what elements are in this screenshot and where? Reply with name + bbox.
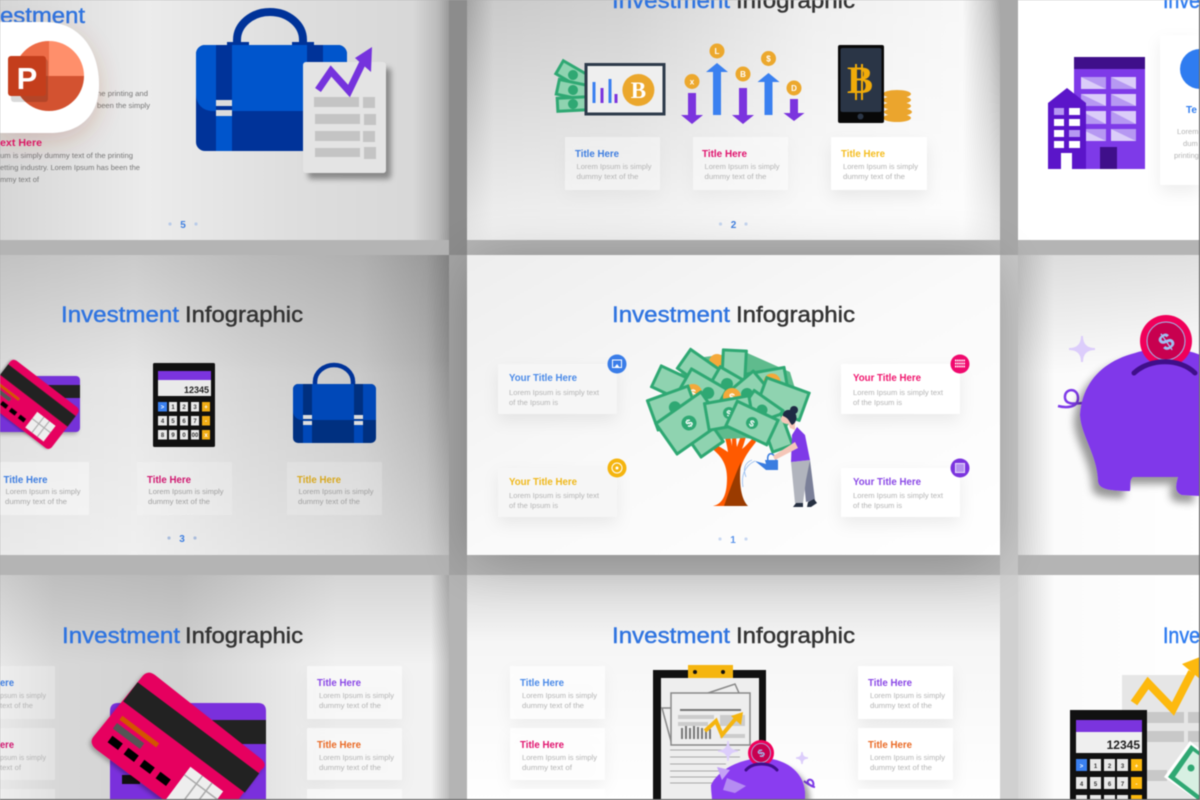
- card: yellow: Title Here: [297, 475, 341, 486]
- icon: rising and falling coin arrows: [681, 44, 804, 124]
- text block: top: been the simply: [97, 101, 150, 110]
- icon: piggy bank: $: [1154, 327, 1181, 357]
- icon: rising and falling coin arrows: D: [791, 84, 797, 93]
- card: right orange: Title Here: [868, 740, 912, 751]
- pagination: 5: [180, 220, 186, 231]
- card: blue: Title Here: [4, 475, 48, 486]
- card: bottom left: Your Title Here: [509, 477, 577, 488]
- card: top left: [498, 364, 617, 414]
- icon: rising and falling coin arrows: $: [766, 54, 771, 64]
- icon: briefcase: [196, 12, 347, 151]
- card: right purple: dummy text of the: [319, 701, 381, 710]
- pagination: [719, 220, 748, 231]
- text block: pink heading: um is simply dummy text of the printing: [0, 151, 133, 160]
- icon: small briefcase: [293, 365, 376, 443]
- icon: calculator: +: [204, 405, 208, 411]
- card: right orange: Lorem Ipsum is simply: [870, 753, 945, 762]
- slide: piggy bank: [1018, 255, 1200, 555]
- card: partial: dum: [1183, 139, 1198, 148]
- pagination: [167, 534, 197, 545]
- icon: calculator: 00: [192, 433, 199, 439]
- pagination: 3: [179, 534, 185, 545]
- slide: clipboard: [467, 575, 1000, 800]
- card: top right: of the Ipsum is: [853, 398, 902, 407]
- text block: top: he printing and: [97, 89, 148, 98]
- title: Infographic: [185, 302, 303, 327]
- card: partial: printing: [1174, 151, 1199, 160]
- title fragment: estment: [0, 3, 85, 28]
- icon: piggy bank small: $: [756, 747, 767, 761]
- card: yellow: Lorem Ipsum is simply: [843, 162, 918, 171]
- bills and coins canopy: $: [747, 418, 756, 429]
- text block: pink heading: mmy text of: [0, 175, 40, 184]
- card: pink: Lorem Ipsum is simply: [704, 162, 780, 171]
- title: Infographic: [185, 623, 303, 648]
- title: [61, 302, 303, 327]
- bills and coins canopy: $: [690, 388, 696, 400]
- pagination: 1: [730, 535, 736, 546]
- card: right orange: Lorem Ipsum is simply: [319, 753, 394, 762]
- card: left pink: [510, 728, 605, 780]
- icon: calculator: 6: [182, 419, 186, 425]
- card: bottom right: of the Ipsum is: [853, 501, 902, 510]
- card: bottom right: Your Title Here: [853, 477, 921, 488]
- card: right purple: Title Here: [317, 678, 361, 689]
- icon: calculator large: 5: [1094, 782, 1098, 788]
- icon: PowerPoint badge: P: [17, 61, 37, 96]
- card: bottom left: Lorem Ipsum is simply text: [509, 491, 600, 500]
- slide 3: card, calculator, bag: [0, 255, 449, 555]
- illustration: person with watering can: [742, 406, 817, 507]
- title: [62, 623, 303, 648]
- title: Investment: [61, 302, 179, 327]
- icon: calculator: >: [161, 405, 165, 411]
- card: partial: Lorem: [1177, 127, 1199, 136]
- card: left blue: [0, 666, 55, 719]
- card: right purple: Lorem Ipsum is simply: [319, 691, 394, 700]
- card: right orange: [858, 728, 953, 780]
- icon: calculator: [153, 363, 215, 447]
- text block: pink heading: [0, 138, 140, 184]
- card: left pink: Title Here: [520, 740, 564, 751]
- card: right purple: dummy text of the: [870, 701, 932, 710]
- icon: piggy bank: [1058, 315, 1200, 496]
- card: left pink: ere: [0, 740, 14, 751]
- icon: rising and falling coin arrows: L: [715, 47, 720, 56]
- icon: report with yellow arrow: [1122, 657, 1200, 800]
- icon: cash bills: [554, 59, 592, 113]
- bills and coins canopy: $: [729, 392, 735, 404]
- card: pink: dummy text of the: [148, 497, 210, 506]
- icon: cash bill: [1164, 741, 1200, 800]
- pagination: 2: [731, 220, 737, 231]
- icon: yellow target badge: [608, 458, 626, 478]
- shadow of the center slide: [475, 265, 992, 555]
- bills and coins canopy: $: [684, 417, 696, 430]
- icon: calculator: 8: [161, 433, 165, 439]
- card: blue: Lorem Ipsum is simply: [6, 487, 81, 496]
- icon: calculator: 3: [193, 405, 197, 411]
- card: left pink: [0, 728, 55, 780]
- card: top right: Your Title Here: [853, 373, 921, 384]
- card: pink: Title Here: [702, 149, 747, 160]
- bills and coins canopy: [646, 347, 811, 459]
- card: top left: of the Ipsum is: [509, 398, 558, 407]
- title: Investment: [612, 302, 730, 327]
- card: yellow: dummy text of the: [843, 172, 905, 181]
- tree trunk: [708, 426, 756, 506]
- card: right third: [307, 789, 402, 800]
- card: right purple: [307, 666, 402, 719]
- card: bottom left: of the Ipsum is: [509, 501, 558, 510]
- icon: calculator: 7: [193, 419, 197, 425]
- card: yellow: [287, 462, 382, 515]
- center slide: money tree: [467, 255, 1000, 555]
- card: left blue: Lorem Ipsum is simply: [522, 691, 597, 700]
- icon: credit cards: [0, 358, 81, 451]
- card: blue: Title Here: [575, 149, 619, 160]
- icon: calculator: 12345: [184, 385, 209, 395]
- card: pink: Title Here: [147, 475, 191, 486]
- title: [612, 623, 855, 648]
- card: right purple: [858, 666, 953, 719]
- card: right purple: Title Here: [868, 678, 912, 689]
- icon: phone with coins: B: [847, 59, 873, 102]
- illustration: money tree: [646, 347, 811, 506]
- icon: calculator: 0: [182, 433, 186, 439]
- icon: PowerPoint badge: [0, 22, 99, 133]
- icon: calculator: 4: [161, 419, 165, 425]
- text block: pink heading: etting industry. Lorem Ipsum has been the: [0, 163, 140, 172]
- icon: calculator: 9: [171, 433, 175, 439]
- slide: calculator and chart: [1018, 575, 1200, 800]
- card: right purple: Lorem Ipsum is simply: [870, 691, 945, 700]
- icon: calculator large: 12345: [1107, 738, 1140, 752]
- icon: calculator large: +: [1135, 764, 1139, 770]
- card: left blue: ere: [0, 678, 14, 689]
- card: top left: Lorem Ipsum is simply text: [509, 388, 600, 397]
- icon: blue monitor badge: [608, 354, 626, 374]
- card: yellow: dummy text of the: [298, 497, 360, 506]
- card: left blue: dummy text of the: [522, 701, 584, 710]
- card: right orange: Title Here: [317, 740, 361, 751]
- card: right third: [858, 789, 953, 800]
- icon: monitor with bitcoin: B: [631, 78, 646, 103]
- icon: rising and falling coin arrows: x: [690, 78, 695, 86]
- icon: calculator: x: [204, 433, 208, 439]
- card: left pink: Lorem Ipsum is simply: [522, 753, 597, 762]
- card: left pink: psum is simply: [0, 753, 46, 762]
- slide 2: crypto: [467, 0, 1000, 240]
- slide: buildings: [1018, 0, 1200, 240]
- icon: calculator: 1: [171, 405, 175, 411]
- icon: calculator large: 2: [1108, 764, 1112, 770]
- icon: sparkle: [1069, 336, 1095, 362]
- icon: calculator large: -: [1136, 782, 1138, 788]
- title: Infographic: [736, 302, 855, 327]
- icon: piggy bank small: [711, 740, 815, 800]
- icon: calculator large: 6: [1108, 782, 1112, 788]
- card: blue: dummy text of the: [5, 497, 67, 506]
- icon: phone with coins: [838, 45, 912, 123]
- icon: buildings: [1048, 57, 1145, 169]
- card: bottom right: Lorem Ipsum is simply text: [853, 491, 944, 500]
- card: blue: Lorem Ipsum is simply: [576, 162, 652, 171]
- card: blue: [565, 137, 660, 190]
- text block: pink heading: ext Here: [0, 138, 42, 149]
- title: Investment: [612, 623, 730, 648]
- card: left blue: [510, 666, 605, 719]
- card: right orange: dummy text of the: [319, 763, 381, 772]
- bills and coins canopy: $: [726, 408, 732, 419]
- title: [612, 302, 855, 327]
- card: right orange: [307, 728, 402, 780]
- card: right orange: dummy text of the: [870, 763, 932, 772]
- icon: calculator large: 1: [1094, 764, 1098, 770]
- title: [612, 0, 855, 13]
- icon: clipboard with report: [653, 665, 766, 800]
- icon: purple window badge: [950, 458, 970, 478]
- icon: calculator large: [1070, 710, 1147, 800]
- icon: report with arrow: [303, 47, 386, 173]
- icon: large credit cards: [92, 673, 266, 800]
- card: left blue: psum is simply: [0, 691, 46, 700]
- title: Investment: [62, 623, 180, 648]
- card: top right: Lorem Ipsum is simply text: [853, 388, 944, 397]
- icon: calculator large: >: [1080, 764, 1084, 770]
- card: left pink: text of: [0, 763, 22, 772]
- card: partial: [1160, 35, 1200, 185]
- bills and coins canopy: $: [769, 377, 775, 389]
- card: yellow: [831, 137, 927, 190]
- icon: monitor with bitcoin: [586, 64, 664, 114]
- card: blue: [0, 462, 89, 515]
- pagination: [168, 220, 198, 231]
- card: left blue: Title Here: [520, 678, 564, 689]
- card: pink: [693, 137, 788, 190]
- card: pink: dummy text of the: [704, 172, 766, 181]
- card: partial: Te: [1186, 105, 1197, 116]
- card: left blue: text of the: [0, 701, 33, 710]
- card: pink: Lorem Ipsum is simply: [148, 487, 224, 496]
- text block: top: [97, 89, 150, 110]
- icon: calculator large: 3: [1121, 764, 1125, 770]
- icon: calculator: -: [205, 419, 207, 425]
- pagination: [718, 535, 748, 546]
- title: Infographic: [736, 623, 855, 648]
- card: blue: dummy text of the: [576, 172, 638, 181]
- card: left third: [510, 789, 605, 800]
- card: pink: [137, 462, 232, 515]
- card: yellow: Title Here: [841, 149, 885, 160]
- icon: calculator: 2: [182, 405, 186, 411]
- card: left pink: dummy text of: [522, 763, 573, 772]
- card: top left: Your Title Here: [509, 373, 577, 384]
- icon: calculator large: 4: [1080, 782, 1084, 788]
- card: yellow: Lorem Ipsum is simply: [298, 487, 374, 496]
- icon: calculator large: 7: [1121, 782, 1125, 788]
- icon: rising and falling coin arrows: B: [740, 70, 746, 79]
- card: bottom left: [498, 468, 617, 517]
- icon: calculator: 5: [171, 419, 175, 425]
- slide: credit card: [0, 575, 449, 800]
- card: top right: [841, 364, 960, 414]
- slide 5: briefcase and chart: [0, 0, 449, 240]
- icon: pink grid badge: [950, 354, 970, 374]
- card: left third: [0, 789, 55, 800]
- card: bottom right: [841, 468, 960, 517]
